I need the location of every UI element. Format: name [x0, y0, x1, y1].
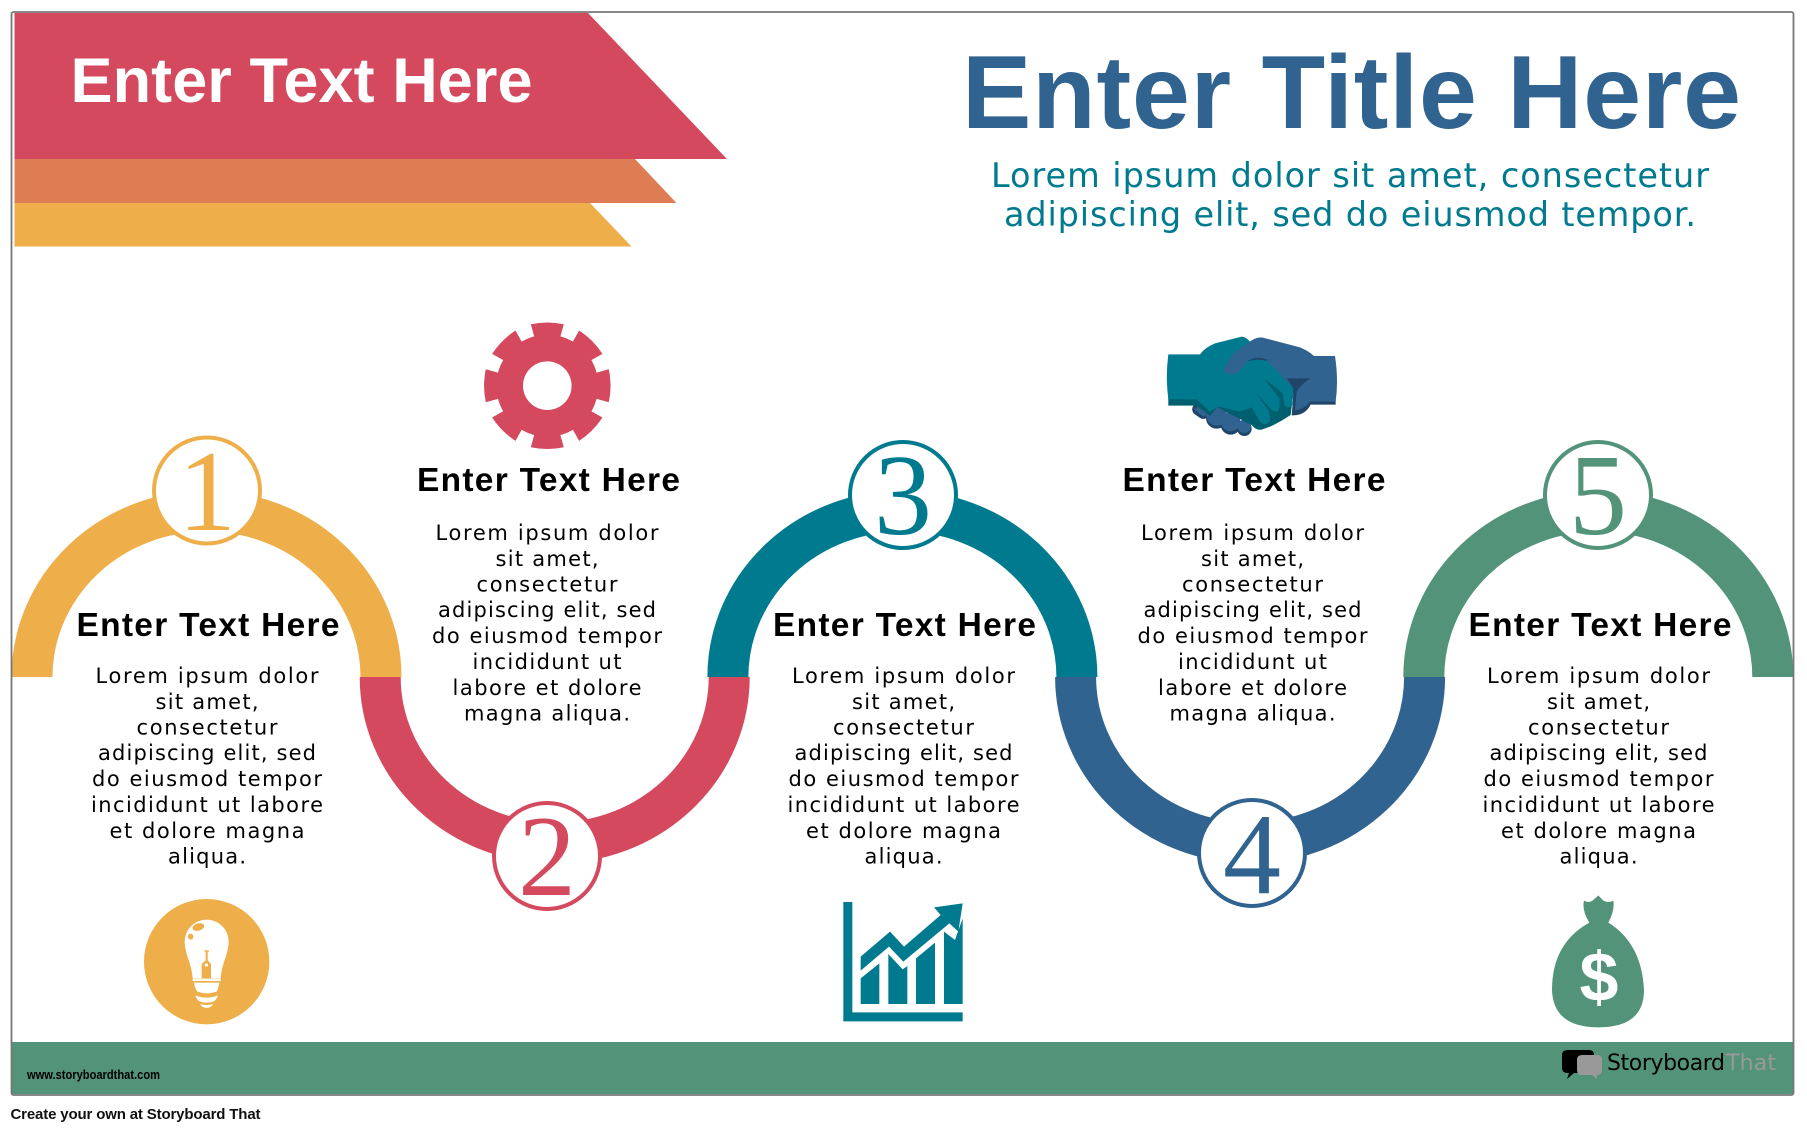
step 5 text: adipiscing elit, sed: [1490, 741, 1708, 765]
icon: light bulb: [144, 899, 269, 1024]
icon: handshake: [1167, 337, 1337, 436]
step 4 text: consectetur: [1182, 572, 1323, 596]
step 3 text: aliqua.: [864, 844, 942, 868]
step 4 text: Enter Text Here: [1122, 462, 1386, 499]
step 5 text: do eiusmod tempor: [1484, 767, 1714, 791]
step 2 text: sit amet,: [496, 547, 598, 571]
number badge 3: [850, 432, 956, 560]
step 2 text: incididunt ut: [472, 650, 622, 674]
logo: That: [1725, 1051, 1776, 1076]
step 3 text: adipiscing elit, sed: [794, 741, 1012, 765]
step 3 text: Lorem ipsum dolor: [792, 664, 1015, 688]
step 3 text: et dolore magna: [806, 819, 1001, 843]
step 2 text: [417, 462, 680, 726]
step 5 text: et dolore magna: [1501, 819, 1696, 843]
step 3 text: sit amet,: [852, 690, 955, 714]
logo: Storyboard: [1607, 1051, 1725, 1076]
number badge 1: [154, 428, 260, 556]
step 1 text: sit amet,: [156, 690, 258, 714]
logo: [1562, 1050, 1776, 1079]
step 1 text: et dolore magna: [110, 819, 304, 843]
footer band: [12, 1042, 1793, 1094]
subtitle: adipiscing elit, sed do eiusmod tempor.: [1004, 195, 1696, 234]
number badge 1: 1: [178, 428, 236, 556]
banner ribbons: [14, 13, 727, 246]
step 5 text: [1468, 607, 1732, 868]
number badge 2: 2: [518, 793, 576, 921]
number badge 5: 5: [1569, 432, 1627, 560]
step 4 text: adipiscing elit, sed: [1144, 598, 1362, 622]
subtitle: [991, 156, 1709, 234]
step 2 text: consectetur: [476, 572, 618, 596]
number badge 3: 3: [874, 432, 932, 560]
step 2 text: Lorem ipsum dolor: [436, 521, 659, 545]
icon: growth chart: [843, 902, 963, 1021]
step 1 text: do eiusmod tempor: [92, 767, 322, 791]
step 4 text: magna aliqua.: [1170, 702, 1336, 726]
step 3 text: Enter Text Here: [773, 607, 1036, 644]
title: Enter Title Here: [962, 35, 1741, 151]
number badge 2: [494, 793, 600, 921]
step 4 text: labore et dolore: [1158, 676, 1347, 700]
number badge 4: 4: [1223, 791, 1281, 919]
step 5 text: Lorem ipsum dolor: [1487, 664, 1710, 688]
number badge 4: [1199, 791, 1305, 919]
step 2 text: do eiusmod tempor: [432, 624, 662, 648]
step 4 text: Lorem ipsum dolor: [1141, 521, 1364, 545]
step 1 text: consectetur: [136, 716, 278, 740]
step 4 text: incididunt ut: [1178, 650, 1327, 674]
icon: money bag: $: [1580, 938, 1618, 1016]
step 5 text: consectetur: [1528, 716, 1669, 740]
step 3 text: [773, 607, 1036, 868]
step 1 text: adipiscing elit, sed: [98, 741, 316, 765]
step 3 text: incididunt ut labore: [788, 793, 1020, 817]
step 3 text: do eiusmod tempor: [788, 767, 1019, 791]
subtitle: Lorem ipsum dolor sit amet, consectetur: [991, 156, 1709, 195]
step 1 text: aliqua.: [168, 844, 246, 868]
footer website: www.storyboardthat.com: [26, 1067, 160, 1082]
icon: money bag: [1552, 895, 1644, 1027]
step 2 text: labore et dolore: [452, 676, 642, 700]
banner heading: Enter Text Here: [70, 46, 532, 116]
step 4 text: do eiusmod tempor: [1138, 624, 1368, 648]
step 2 text: Enter Text Here: [417, 462, 680, 499]
credit line: Create your own at Storyboard That: [10, 1106, 260, 1123]
step 5 text: sit amet,: [1547, 690, 1650, 714]
step 2 text: magna aliqua.: [464, 702, 630, 726]
number badge 5: [1545, 432, 1651, 560]
step 3 text: consectetur: [833, 716, 974, 740]
step 5 text: aliqua.: [1560, 844, 1638, 868]
step 1 text: Enter Text Here: [76, 607, 340, 644]
step 1 text: Lorem ipsum dolor: [96, 664, 319, 688]
step 4 text: sit amet,: [1201, 547, 1304, 571]
step 5 text: Enter Text Here: [1468, 607, 1732, 644]
step 1 text: incididunt ut labore: [91, 793, 323, 817]
step 5 text: incididunt ut labore: [1482, 793, 1714, 817]
step 4 text: [1122, 462, 1386, 726]
icon: gear: [484, 322, 611, 449]
step 2 text: adipiscing elit, sed: [438, 598, 656, 622]
wave arcs: [32, 511, 1773, 843]
step 1 text: [76, 607, 340, 868]
